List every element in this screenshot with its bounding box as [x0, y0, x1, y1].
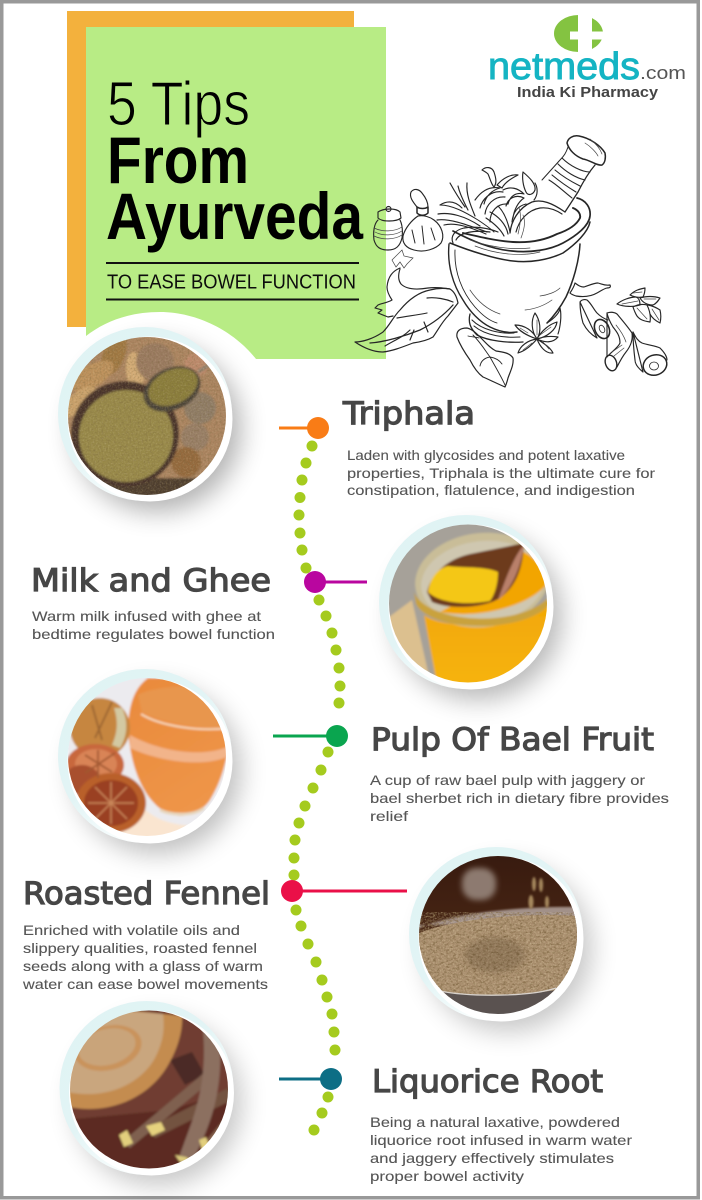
ginger root pieces [580, 300, 670, 379]
green title panel [86, 27, 386, 359]
orange backing panel [67, 11, 354, 327]
heading: Roasted Fennel: Roasted Fennel [23, 876, 270, 912]
jar [374, 206, 402, 250]
pestle [542, 136, 605, 212]
text: Milk and Ghee description [32, 608, 275, 642]
logo .com: .com [640, 63, 686, 83]
text: Milk and Ghee description: Warm milk infused with ghee at [32, 608, 261, 624]
text: Liquorice description: and jaggery effectively stimulates [370, 1150, 614, 1166]
marker: orange [279, 417, 329, 439]
text: Triphala description [347, 447, 655, 498]
text: Triphala description: constipation, flatulence, and indigestion [347, 482, 635, 498]
title: 5 Tips: 5 Tips [107, 70, 250, 139]
heart-shaped leaf [457, 328, 513, 387]
text: Fennel description: slippery qualities, roasted fennel [23, 940, 257, 956]
text: Bael description [370, 772, 669, 824]
photo: ghee jar [379, 515, 562, 700]
marker: red [281, 880, 407, 902]
small star spice [392, 250, 413, 268]
text: Liquorice description: proper bowel activity [370, 1168, 524, 1184]
text: Bael description: relief [370, 808, 408, 824]
text: Fennel description: seeds along with a glass of warm [23, 958, 263, 974]
logo cross icon [554, 12, 606, 56]
netmeds logo [488, 12, 686, 101]
mortar bowl [449, 198, 590, 342]
text: Liquorice description: Being a natural laxative, powdered [370, 1114, 620, 1130]
small leaves [617, 288, 661, 323]
title panel [67, 11, 386, 359]
text: Bael description: A cup of raw bael pulp with jaggery or [370, 772, 645, 788]
chili [570, 283, 610, 297]
logo wordmark: netmeds [488, 46, 640, 88]
photo: roasted fennel seeds [409, 847, 592, 1032]
title: From: From [107, 123, 249, 197]
marker: green [273, 725, 348, 747]
text: Liquorice description [370, 1114, 632, 1184]
heading: Triphala: Triphala [342, 396, 475, 432]
text: Liquorice description: liquorice root infused in warm water [370, 1132, 632, 1148]
text: Fennel description: Enriched with volatile oils and [23, 922, 240, 938]
tip: Roasted Fennel [22, 876, 270, 992]
herbs in mortar [437, 168, 565, 243]
large feather leaf [355, 268, 458, 352]
text: Fennel description: water can ease bowel movements [22, 976, 268, 992]
tip: Liquorice Root [370, 1064, 632, 1184]
heading: Liquorice Root: Liquorice Root [372, 1064, 603, 1100]
text: Fennel description [22, 922, 268, 992]
marker: teal [279, 1068, 342, 1090]
photo: triphala powder [55, 327, 241, 512]
text: Milk and Ghee description: bedtime regulates bowel function [32, 626, 275, 642]
photo: bael fruit juice [58, 669, 241, 854]
subtitle with rules: TO EASE BOWEL FUNCTION [107, 272, 356, 294]
title: Ayurveda: Ayurveda [106, 179, 364, 253]
star anise [515, 313, 558, 353]
logo tagline: India Ki Pharmacy [517, 85, 658, 101]
tip: Pulp Of Bael Fruit [370, 722, 669, 824]
heading: Milk and Ghee: Milk and Ghee [31, 563, 271, 599]
text: Triphala description: properties, Triphala is the ultimate cure for [347, 465, 655, 481]
marker: magenta [304, 571, 367, 593]
text: Bael description: bael sherbet rich in dietary fibre provides [370, 790, 669, 806]
heading: Pulp Of Bael Fruit: Pulp Of Bael Fruit [371, 722, 654, 758]
herbal poultice bag [403, 189, 443, 251]
text: Triphala description: Laden with glycosides and potent laxative [347, 447, 625, 463]
tip: Triphala [342, 396, 655, 498]
photo: liquorice root [60, 1001, 242, 1186]
illustration: mortar and pestle with herbs [355, 136, 670, 387]
timeline of dots [288, 440, 346, 1136]
tip: Milk and Ghee [31, 563, 275, 642]
